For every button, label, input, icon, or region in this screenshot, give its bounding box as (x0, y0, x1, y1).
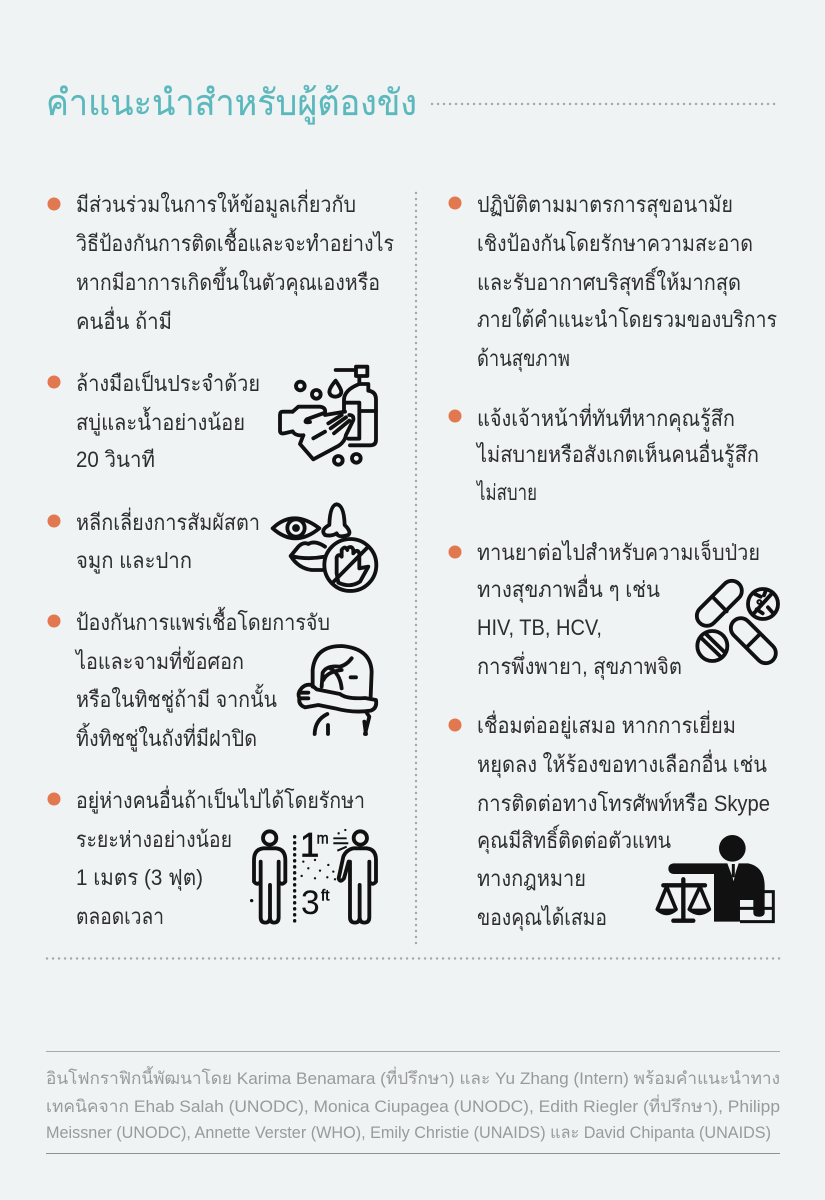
advice: cover coughs: หรือในทิชชู่ถ้ามี จากนั้น (76, 684, 277, 713)
advice: avoid touching face: จมูก และปาก (76, 548, 192, 574)
advice: cover coughs: ป้องกันการแพร่เชื้อโดยการจับ (76, 607, 330, 635)
advice: tell staff: แจ้งเจ้าหน้าที่ทันทีหากคุณรู้สึก (477, 403, 735, 432)
advice: cover coughs: ไอและจามที่ข้อศอก (74, 646, 244, 674)
advice: hygiene measures: เชิงป้องกันโดยรักษาความสะอาด (477, 231, 753, 256)
advice: keep distance: ระยะห่างอย่างน้อย (76, 827, 232, 852)
advice: continue medication: ทานยาต่อไปสำหรับความเจ็บป่วย (477, 538, 760, 565)
icon: hand washing with soap (280, 367, 376, 465)
advice: hygiene measures: ปฏิบัติตามมาตรการสุขอนามัย (477, 192, 733, 218)
icon: lawyer with scales of justice (657, 835, 773, 922)
advice: continue medication (448, 538, 760, 680)
advice: keep distance: ตลอดเวลา (76, 904, 164, 929)
advice: tell staff: ไม่สบายหรือสังเกตเห็นคนอื่นรู้สึก (475, 439, 759, 468)
title: คำแนะนำสำหรับผู้ต้องขัง (46, 82, 417, 125)
advice: wash hands: 20 วินาที (76, 447, 155, 472)
icon: keep 1 metre / 3 feet distance: 1 (300, 827, 319, 865)
advice: cover coughs: ทิ้งทิชชู่ในถังที่มีฝาปิด (76, 723, 257, 752)
icon: keep 1 metre / 3 feet distance: m (317, 830, 329, 847)
advice: share information (48, 189, 394, 334)
advice: hygiene measures: ภายใต้คำแนะนำโดยรวมของบริการ (477, 307, 777, 332)
advice: hygiene measures: และรับอากาศบริสุทธิ์ให้มากสุด (477, 267, 741, 296)
advice: stay connected: การติดต่อทางโทรศัพท์หรือ Skype (477, 791, 770, 816)
icon: pills (693, 577, 780, 667)
advice: share information: วิธีป้องกันการติดเชื้อและจะทำอย่างไร (75, 228, 394, 256)
advice: continue medication: การพึ่งพายา, สุขภาพจิต (477, 651, 682, 680)
advice: stay connected: ของคุณได้เสมอ (477, 905, 607, 931)
panel: right column advice (448, 192, 777, 931)
icon: person coughing into elbow (299, 646, 376, 734)
advice: continue medication: ทางสุขภาพอื่น ๆ เช่น (477, 574, 660, 603)
advice: stay connected: ทางกฎหมาย (477, 866, 586, 891)
advice: keep distance: 1 เมตร (3 ฟุต) (76, 865, 203, 891)
advice: avoid touching face: หลีกเลี่ยงการสัมผัสตา (76, 507, 260, 535)
advice: share information: หากมีอาการเกิดขึ้นในตัวคุณเองหรือ (76, 267, 380, 296)
advice: share information: มีส่วนร่วมในการให้ข้อมูลเกี่ยวกับ (76, 189, 356, 218)
icon: keep 1 metre / 3 feet distance (250, 827, 376, 925)
footer credits: เทคนิคจาก Ehab Salah (UNODC), Monica Ciupagea (UNODC), Edith Riegler (ที่ปรึกษา), Philipp (46, 1094, 780, 1116)
icon: keep 1 metre / 3 feet distance: 3 (301, 884, 320, 922)
advice: stay connected: เชื่อมต่ออยู่เสมอ หากการเยี่ยม (477, 710, 736, 739)
footer credits: Meissner (UNODC), Annette Verster (WHO), Emily Christie (UNAIDS) และ David Chipanta (UNAIDS) (46, 1123, 771, 1142)
advice: share information: คนอื่น ถ้ามี (76, 306, 172, 334)
advice: keep distance (48, 785, 365, 929)
advice: wash hands: สบู่และน้ำอย่างน้อย (76, 407, 245, 436)
advice: tell staff (448, 403, 759, 505)
icon: keep 1 metre / 3 feet distance: ft (321, 888, 330, 905)
person left (254, 831, 285, 923)
advice: stay connected: คุณมีสิทธิ์ติดต่อตัวแทน (477, 825, 671, 854)
advice: avoid touching face (48, 507, 260, 574)
advice: stay connected: หยุดลง ให้ร้องขอทางเลือกอื่น เช่น (477, 749, 767, 778)
advice: keep distance: อยู่ห่างคนอื่นถ้าเป็นไปได้โดยรักษา (76, 785, 365, 814)
person right (339, 831, 376, 923)
panel: left column advice (48, 189, 394, 929)
icon: eye, nose, lips with crossed-out hand (273, 504, 376, 591)
advice: wash hands: ล้างมือเป็นประจำด้วย (76, 369, 260, 396)
advice: hygiene measures (448, 192, 777, 372)
advice: tell staff: ไม่สบาย (475, 480, 537, 505)
advice: stay connected (448, 710, 770, 931)
advice: cover coughs (48, 607, 330, 752)
footer credits (46, 1052, 780, 1154)
advice: continue medication: HIV, TB, HCV, (477, 615, 602, 640)
advice: hygiene measures: ด้านสุขภาพ (477, 346, 570, 372)
advice: wash hands (48, 369, 260, 472)
footer credits: อินโฟกราฟิกนี้พัฒนาโดย Karima Benamara (ที่ปรึกษา) และ Yu Zhang (Intern) พร้อมคำแนะนำทาง (46, 1066, 780, 1088)
